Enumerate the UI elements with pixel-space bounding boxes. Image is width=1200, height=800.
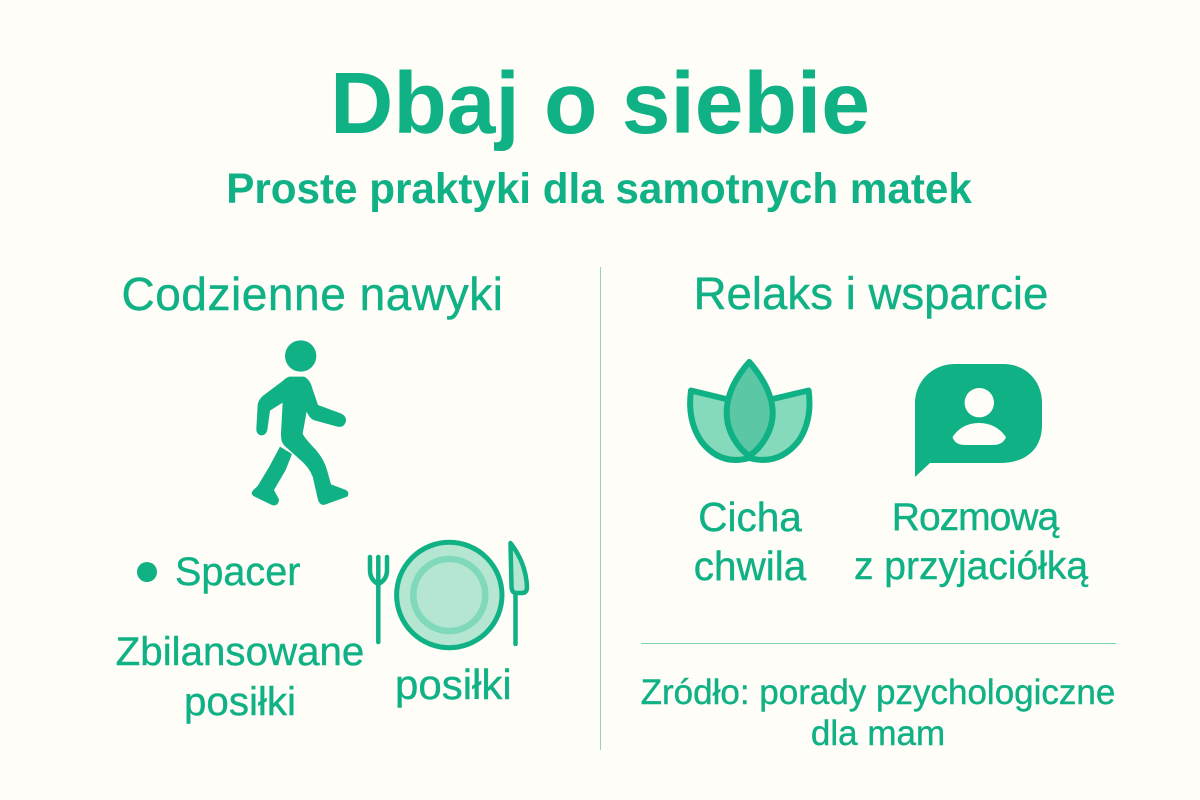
icon: lotus — [687, 359, 812, 463]
source note: Zródło: porady pzychologiczne — [641, 673, 1115, 712]
icon: walking person — [252, 340, 348, 506]
label: meals: posiłki — [395, 661, 512, 708]
label: balanced meals: posiłki — [184, 679, 296, 724]
heading: relax and support: Relaks i wsparcie — [694, 268, 1048, 319]
source note — [641, 673, 1115, 753]
label: talk with a friend: Rozmową — [892, 496, 1058, 539]
title: Dbaj o siebie — [330, 54, 870, 152]
label: talk with a friend — [854, 496, 1088, 588]
source note: dla mam — [811, 714, 945, 753]
horizontal divider — [641, 643, 1116, 644]
icon: chat bubble with person — [915, 364, 1042, 477]
label: talk with a friend: z przyjaciółką — [854, 545, 1088, 588]
label: quiet moment: Cicha — [698, 494, 802, 540]
icon: plate with cutlery — [368, 540, 530, 650]
label: balanced meals — [116, 629, 364, 724]
heading: daily habits: Codzienne nawyki — [121, 268, 504, 320]
vertical divider — [600, 267, 601, 750]
label: quiet moment: chwila — [694, 543, 806, 589]
label: quiet moment — [694, 494, 806, 589]
bullet dot — [137, 562, 157, 582]
subtitle: Proste praktyki dla samotnych matek — [226, 165, 972, 212]
label: walk: Spacer — [175, 550, 300, 594]
label: balanced meals: Zbilansowane — [116, 629, 364, 674]
